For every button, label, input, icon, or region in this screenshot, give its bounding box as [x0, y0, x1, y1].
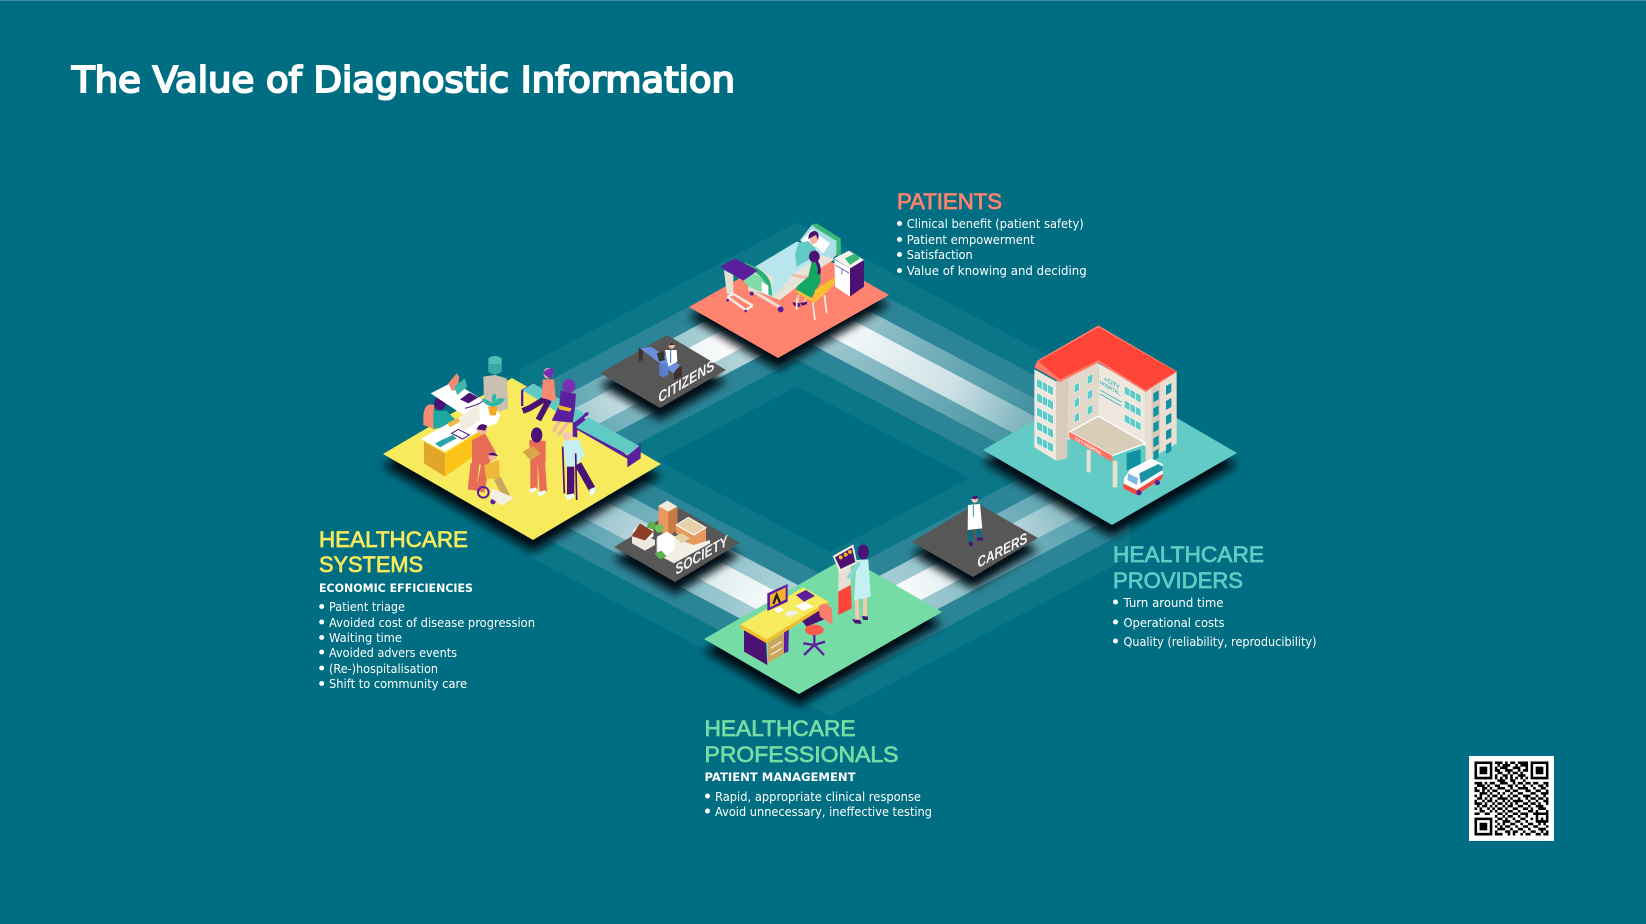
pad shadows: [383, 254, 1237, 706]
bedside illustration: [720, 223, 864, 320]
heading: healthcare systems: [319, 527, 468, 577]
heading: healthcare professionals: PROFESSIONALS: [704, 742, 898, 767]
list: patients: Value of knowing and deciding: [907, 264, 1087, 278]
heading: healthcare systems: HEALTHCARE: [319, 527, 468, 552]
society floor: [614, 508, 740, 582]
citizens floor: [600, 335, 726, 408]
list: patients: Patient empowerment: [907, 233, 1035, 247]
list: patients: Satisfaction: [907, 248, 973, 262]
text block: patients: [897, 189, 1087, 278]
list: healthcare systems: [329, 600, 535, 691]
providers floor: [983, 378, 1237, 525]
heading: healthcare systems: SYSTEMS: [319, 552, 423, 577]
list: healthcare providers: [1123, 596, 1316, 649]
heading: healthcare providers: HEALTHCARE: [1113, 542, 1264, 567]
panel: healthcare providers pad with hospital: [983, 325, 1237, 525]
subheading: economic efficiencies: ECONOMIC EFFICIENCIES: [319, 581, 473, 595]
list: healthcare systems: Avoided cost of disease progression: [329, 616, 535, 630]
list: healthcare systems: Patient triage: [329, 600, 405, 614]
panel: carers pad: [912, 496, 1038, 577]
QR code: [1469, 756, 1554, 841]
doctor illustration: [968, 496, 983, 547]
hospital wall sign: +CITY: [1104, 376, 1120, 392]
canopy sign: CITY HOSPITAL: [1075, 436, 1102, 456]
list: healthcare professionals: Rapid, appropriate clinical response: [715, 790, 921, 804]
panel: healthcare systems pad with waiting room: [383, 356, 661, 540]
society label: SOCIETY: [674, 533, 730, 579]
bullets: healthcare providers: [1113, 600, 1118, 644]
bullets: healthcare professionals: [705, 794, 710, 814]
heading: healthcare providers: [1113, 542, 1264, 593]
bullets: patients: [897, 221, 902, 273]
list: healthcare systems: Waiting time: [329, 631, 402, 645]
panel: healthcare professionals pad with desk and kiosk: [704, 544, 942, 694]
heading: healthcare professionals: [704, 716, 898, 767]
text block: healthcare providers: [1113, 542, 1316, 649]
desk and clinician illustration: [741, 544, 871, 665]
systems floor: [383, 378, 661, 540]
text block: healthcare systems: [319, 527, 535, 691]
list: healthcare systems: Shift to community care: [329, 677, 467, 691]
list: patients: Clinical benefit (patient safety): [907, 217, 1084, 231]
panel: society pad: [614, 501, 740, 582]
town illustration: [632, 501, 710, 563]
connecting bands forming the value diamond: [520, 222, 1130, 716]
citizens label: CITIZENS: [657, 357, 716, 407]
panel: citizens pad: [600, 335, 726, 408]
heading: healthcare professionals: HEALTHCARE: [704, 716, 856, 741]
hospital illustration: [1034, 325, 1177, 495]
heading: patients: PATIENTS: [897, 189, 1002, 214]
list: healthcare providers: Quality (reliability, reproducibility): [1124, 635, 1316, 649]
title: The Value of Diagnostic Information: [71, 60, 735, 101]
text block: healthcare professionals: [704, 716, 932, 819]
list: healthcare providers: Operational costs: [1124, 616, 1224, 630]
panel: patients pad with bedside scene: [689, 223, 889, 358]
heading: healthcare providers: PROVIDERS: [1113, 568, 1243, 593]
list: patients: [907, 217, 1087, 278]
list: healthcare professionals: [715, 790, 932, 819]
list: healthcare professionals: Avoid unnecessary, ineffective testing: [715, 805, 932, 819]
list: healthcare systems: Avoided advers events: [329, 646, 457, 660]
bullets: healthcare systems: [319, 604, 324, 686]
list: healthcare systems: (Re-)hospitalisation: [329, 662, 438, 676]
patients floor: [689, 244, 889, 358]
hospital wall sign second line: HOSPITAL: [1100, 380, 1120, 398]
carers floor: [912, 503, 1038, 577]
seated doctor on couch: [639, 343, 682, 381]
professionals floor: [704, 557, 942, 694]
subheading: patient management: PATIENT MANAGEMENT: [704, 770, 856, 784]
waiting room illustration: [421, 356, 641, 506]
list: healthcare providers: Turn around time: [1123, 596, 1224, 610]
carers label: CARERS: [976, 530, 1029, 572]
